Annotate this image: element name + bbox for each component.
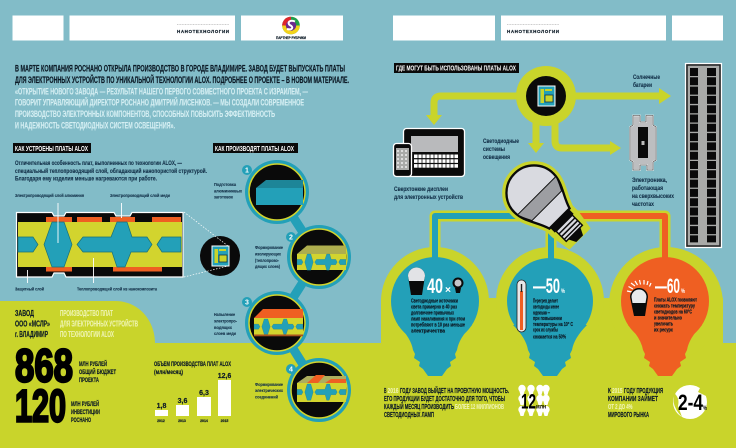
label: displays: Сверхтонкие дисплеи <box>394 187 448 193</box>
structure description: Благодаря ему изделия меньше нагреваются при работе. <box>15 176 157 183</box>
heading: how boards are built: КАК УСТРОЕНЫ ПЛАТЫ ALOX <box>15 144 88 153</box>
yellow layer <box>18 222 182 267</box>
benefit bulb 3: temperature <box>621 257 709 376</box>
process step 3: 3 <box>245 300 249 306</box>
bar chart: ALOX production: 2015 <box>221 419 228 423</box>
step 3 label: водящих <box>214 326 232 331</box>
step 4 label: соединений <box>255 394 278 400</box>
plant info: г. ВЛАДИМИР <box>15 330 48 339</box>
bottom text: 2016 capacity: БОЛЕЕ 12 МИЛЛИОНОВ <box>455 404 504 411</box>
label: LED lighting <box>483 139 520 161</box>
text: снижается на 50% <box>533 334 566 340</box>
text: снижать температуру <box>654 303 695 309</box>
stat: 120 investment: МЛН РУБЛЕЙ <box>71 399 99 408</box>
plant info: ДЛЯ ЭЛЕКТРОННЫХ УСТРОЙСТВ <box>60 320 138 328</box>
step 1 label: заготовок <box>214 196 233 200</box>
label: solar batteries <box>633 75 661 89</box>
structure description: Отличительная особенность плат, выполненных по технологии ALOX, — <box>15 160 182 167</box>
icon: solar panel <box>686 64 722 248</box>
bottom text: 2016 capacity: ЕГО ПРОДУКЦИИ БУДЕТ ДОСТАТОЧНО ДЛЯ ТОГО, ЧТОБЫ <box>384 396 505 403</box>
process step 3 <box>242 291 309 355</box>
process step 2: 2 <box>289 234 293 242</box>
header boxes: left page <box>12 16 343 40</box>
green lower background <box>0 247 736 448</box>
icon: 12 million lamps: 12 <box>521 390 536 414</box>
stat: 120 investment: ИНВЕСТИЦИИ <box>71 409 100 416</box>
board body <box>16 212 183 277</box>
step 4 label: электрических <box>255 389 283 394</box>
text: Перегрев делает <box>533 299 558 305</box>
icon: high-frequency electronic component <box>630 116 656 170</box>
label: protective layer: Защитный слой <box>15 286 44 293</box>
chart title <box>154 361 231 376</box>
value: 40x: 40 <box>427 275 443 298</box>
bar chart: ALOX production: 12,6 <box>218 373 231 380</box>
icon: globe with market share: 2-4 <box>678 390 704 415</box>
plant info <box>15 309 138 339</box>
text: электричества <box>411 328 445 334</box>
text: увеличить <box>654 322 673 328</box>
bottom text: 2016 capacity: ГОДУ ЗАВОД ВЫЙДЕТ НА ПРОЕКТНУЮ МОЩНОСТЬ. <box>400 386 509 395</box>
stat: 120 investment: 120 <box>15 380 66 432</box>
icon: bright bulb with rays <box>627 280 651 316</box>
label: copper layer: Электропроводящий слой меди <box>110 192 170 199</box>
icon: globe with market share <box>673 385 707 419</box>
process step 1: 1 <box>245 168 249 174</box>
bottom text: 2016 capacity <box>384 386 509 419</box>
chart title: (млн/месяц) <box>154 369 183 376</box>
step 3 label: электропро- <box>214 319 237 324</box>
section name right: НАНОТЕХНОЛОГИИ <box>507 29 559 34</box>
label: solar batteries: Солнечные <box>633 75 661 81</box>
bottom text: market share: ГОДУ ПРОДУКЦИЯ <box>624 388 663 395</box>
plant info: ЗАВОД <box>15 309 34 318</box>
step 2 label: (теплопрово- <box>255 258 279 264</box>
text: потребляют в 10 раз меньше <box>411 322 465 329</box>
bottom text: market share <box>608 388 663 419</box>
teal aluminium shapes <box>18 222 181 267</box>
section name: НАНОТЕХНОЛОГИИ <box>177 29 229 34</box>
bar chart: ALOX production: 3,6 <box>178 398 187 405</box>
step 2 label <box>255 245 283 270</box>
icon: 12 million lamps: млн <box>536 404 546 410</box>
text: света примерно в 40 раз <box>411 305 457 311</box>
bottom text: 2016 capacity: 2016 <box>388 388 399 395</box>
intro text: И НАДЕЖНОСТЬ СВЕТОДИОДНЫХ СИСТЕМ ОСВЕЩЕНИЯ». <box>15 120 175 130</box>
step 3 label: слоев меди <box>214 332 236 337</box>
text: и значительно <box>654 315 682 321</box>
text: температуры на 10° С <box>533 322 573 328</box>
plant info: ПРОИЗВОДСТВО ПЛАТ <box>60 309 113 318</box>
label: LED lighting: освещения <box>483 155 510 161</box>
process step 1 <box>242 160 309 224</box>
text: светодиоды менее <box>533 304 559 310</box>
text: светодиодов на 60°С <box>654 309 692 315</box>
text: их ресурс <box>654 328 673 334</box>
step 2 label: изолирующих <box>255 252 281 257</box>
label: LED lighting: системы <box>483 147 505 153</box>
text <box>654 298 697 334</box>
structure description <box>15 160 207 183</box>
intro text <box>15 64 349 130</box>
label: electronics: на сверхвысоких <box>632 194 675 200</box>
heading: where boards can be used <box>394 63 519 73</box>
heading: where boards can be used: ГДЕ МОГУТ БЫТЬ ИСПОЛЬЗОВАНЫ ПЛАТЫ ALOX <box>396 64 516 73</box>
hub with chip <box>516 66 576 126</box>
partner caption: ПАРТНЕР РУБРИКИ <box>276 36 307 40</box>
stat: 120 investment: РОСНАНО <box>71 417 91 424</box>
chart title: ОБЪЕМ ПРОИЗВОДСТВА ПЛАТ ALOX <box>154 361 231 368</box>
step 4 label: Формирование <box>255 382 283 388</box>
label: electronics: частотах <box>632 202 655 208</box>
stat: 868 budget: 868 <box>15 340 73 392</box>
step 3 label <box>214 312 237 337</box>
heading: how boards are made: КАК ПРОИЗВОДЯТ ПЛАТЫ ALOX <box>215 144 294 153</box>
step 1 label <box>214 182 242 200</box>
stat: 868 budget: МЛН РУБЛЕЙ <box>79 359 107 368</box>
intro text: «ОТКРЫТИЕ НОВОГО ЗАВОДА — РЕЗУЛЬТАТ НАШЕГО ПЕРВОГО СОВМЕСТНОГО ПРОЕКТА С ИЗРАИЛЕМ, — <box>15 86 308 96</box>
process step 2 <box>286 225 351 289</box>
intro text: ГОВОРИТ УПРАВЛЯЮЩИЙ ДИРЕКТОР РОСНАНО ДМИТРИЙ ЛИСЕНКОВ. — МЫ СОЗДАЛИ СОВРЕМЕННОЕ <box>15 97 304 108</box>
icon: LED bulb <box>408 268 425 295</box>
bar chart: ALOX production <box>154 361 231 423</box>
text: долговечнее привычных <box>411 311 454 317</box>
label: aluminium layer: Электропроводящий слой алюминия <box>15 192 84 199</box>
benefit bulb 1: lifetime <box>391 257 479 376</box>
label: LED lighting: Светодиодные <box>483 139 520 145</box>
board cross-section diagram <box>15 192 183 293</box>
bottom text: 2016 capacity: СВЕТОДИОДНЫХ ЛАМП <box>384 412 434 419</box>
label: electronics: Электроника, <box>632 178 667 184</box>
step 2 label: дящих слоев) <box>255 264 280 270</box>
plant info: ООО «МСЛР» <box>15 320 50 328</box>
text: ламп накаливания и при этом <box>411 317 465 323</box>
intro text: ДЛЯ ЭЛЕКТРОННЫХ УСТРОЙСТВ ПО УНИКАЛЬНОЙ ТЕХНОЛОГИИ ALOX. ПОДРОБНЕЕ О ПРОЕКТЕ – В НОВОМ МАТЕРИАЛЕ. <box>15 74 349 85</box>
benefit bulb 2: overheating <box>507 258 593 376</box>
benefit bulb 2: overheating: % <box>561 289 565 295</box>
process step 4: 4 <box>289 366 293 374</box>
icon: globe with market share: % <box>703 406 707 412</box>
process connectors <box>277 192 319 390</box>
bottom text: 2016 capacity: КАЖДЫЙ МЕСЯЦ ПРОИЗВОДИТЬ <box>384 402 454 411</box>
text: срок их службы <box>533 327 558 334</box>
bottom text: market share: МИРОВОГО РЫНКА <box>608 412 649 419</box>
label: electronics: работающая <box>632 185 663 192</box>
bottom text: market share: 2015 <box>612 388 623 395</box>
label: displays <box>394 187 463 201</box>
intro text: В МАРТЕ КОМПАНИЯ РОСНАНО ОТКРЫЛА ПРОИЗВОДСТВО В ГОРОДЕ ВЛАДИМИРЕ. ЗАВОД БУДЕТ ВЫПУСКАТЬ ПЛАТЫ <box>15 64 345 74</box>
plant info: ПО ТЕХНОЛОГИИ ALOX <box>60 330 114 339</box>
zoom callout: chip <box>184 212 240 277</box>
bar chart: ALOX production: 6,3 <box>199 390 209 397</box>
text: при повышении <box>533 316 562 322</box>
header boxes: right page <box>393 16 723 40</box>
icon: thermometer <box>517 280 526 332</box>
value: -50%: —50 <box>533 275 560 298</box>
connectors from lamp to benefit bulbs <box>435 216 665 260</box>
icon: partner logo <box>282 17 300 34</box>
icon: 12 million lamps <box>518 385 550 416</box>
process step 4 <box>286 358 351 422</box>
step 4 label <box>255 382 283 400</box>
heading: how boards are built <box>13 143 91 153</box>
bar chart: ALOX production: 2014 <box>200 419 208 423</box>
text <box>411 299 465 334</box>
text: Светодиодные источники <box>411 299 458 305</box>
label: displays: для электронных устройств <box>394 194 463 201</box>
copper pads <box>46 217 181 272</box>
stat: 868 budget: ОБЩИЙ БЮДЖЕТ <box>79 367 117 376</box>
step 1 label: Подготовка <box>214 182 236 188</box>
text: надежными — <box>533 310 550 316</box>
bar chart: ALOX production: 2012 <box>157 419 165 423</box>
stat: 868 budget: ПРОЕКТА <box>79 377 99 384</box>
bottom text: 2016 capacity: В <box>384 388 386 395</box>
heading: how boards are made <box>213 143 298 153</box>
text: Платы ALOX позволяют <box>654 298 697 304</box>
step 2 label: Формирование <box>255 245 283 251</box>
icon: tablet and phone <box>394 128 464 176</box>
bottom text: market share: КОМПАНИИ ЗАЙМЕТ <box>608 394 658 403</box>
bottom text: market share: К <box>608 388 612 395</box>
arrows from hub <box>434 96 661 148</box>
intro text: ПРОИЗВОДСТВО ЭЛЕКТРОННЫХ КОМПОНЕНТОВ, СПОСОБНЫХ ПОВЫСИТЬ ЭФФЕКТИВНОСТЬ <box>15 109 275 119</box>
text <box>533 299 573 340</box>
label: heat-conducting layer: Теплопроводящий слой из нанокомпозита <box>77 286 157 293</box>
bottom text: market share: ОТ 2 ДО 4% <box>608 404 633 411</box>
benefit bulb 3: temperature: % <box>681 289 685 295</box>
bar chart: ALOX production: 2013 <box>178 419 186 423</box>
icon: main LED lamp <box>495 154 599 258</box>
step 3 label: Напыление <box>214 312 235 318</box>
icon: incandescent bulb <box>452 278 464 293</box>
benefit bulb 1: lifetime: × <box>445 285 451 296</box>
step 1 label: алюминиевых <box>214 189 242 194</box>
label: electronics <box>632 178 675 208</box>
label: solar batteries: батареи <box>633 82 652 89</box>
value: -60%: —60 <box>655 275 680 298</box>
structure description: специальный теплопроводящий слой, обладающий нанопористой структурой. <box>15 168 207 175</box>
bar chart: ALOX production: 1,8 <box>157 403 166 410</box>
